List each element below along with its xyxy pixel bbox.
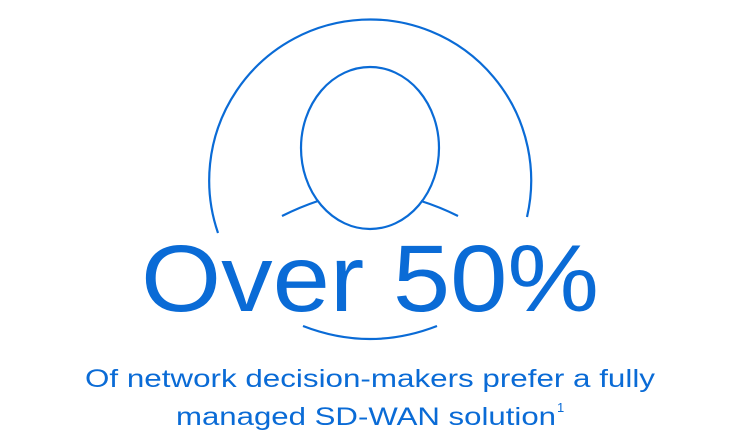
caption: Of network decision-makers prefer a fully [85, 365, 656, 393]
caption: 1 [557, 400, 564, 415]
icon: person in circle [209, 19, 531, 339]
caption [85, 365, 656, 431]
caption: managed SD-WAN solution [176, 403, 556, 431]
headline: Over 50%: Over 50% [141, 226, 599, 332]
